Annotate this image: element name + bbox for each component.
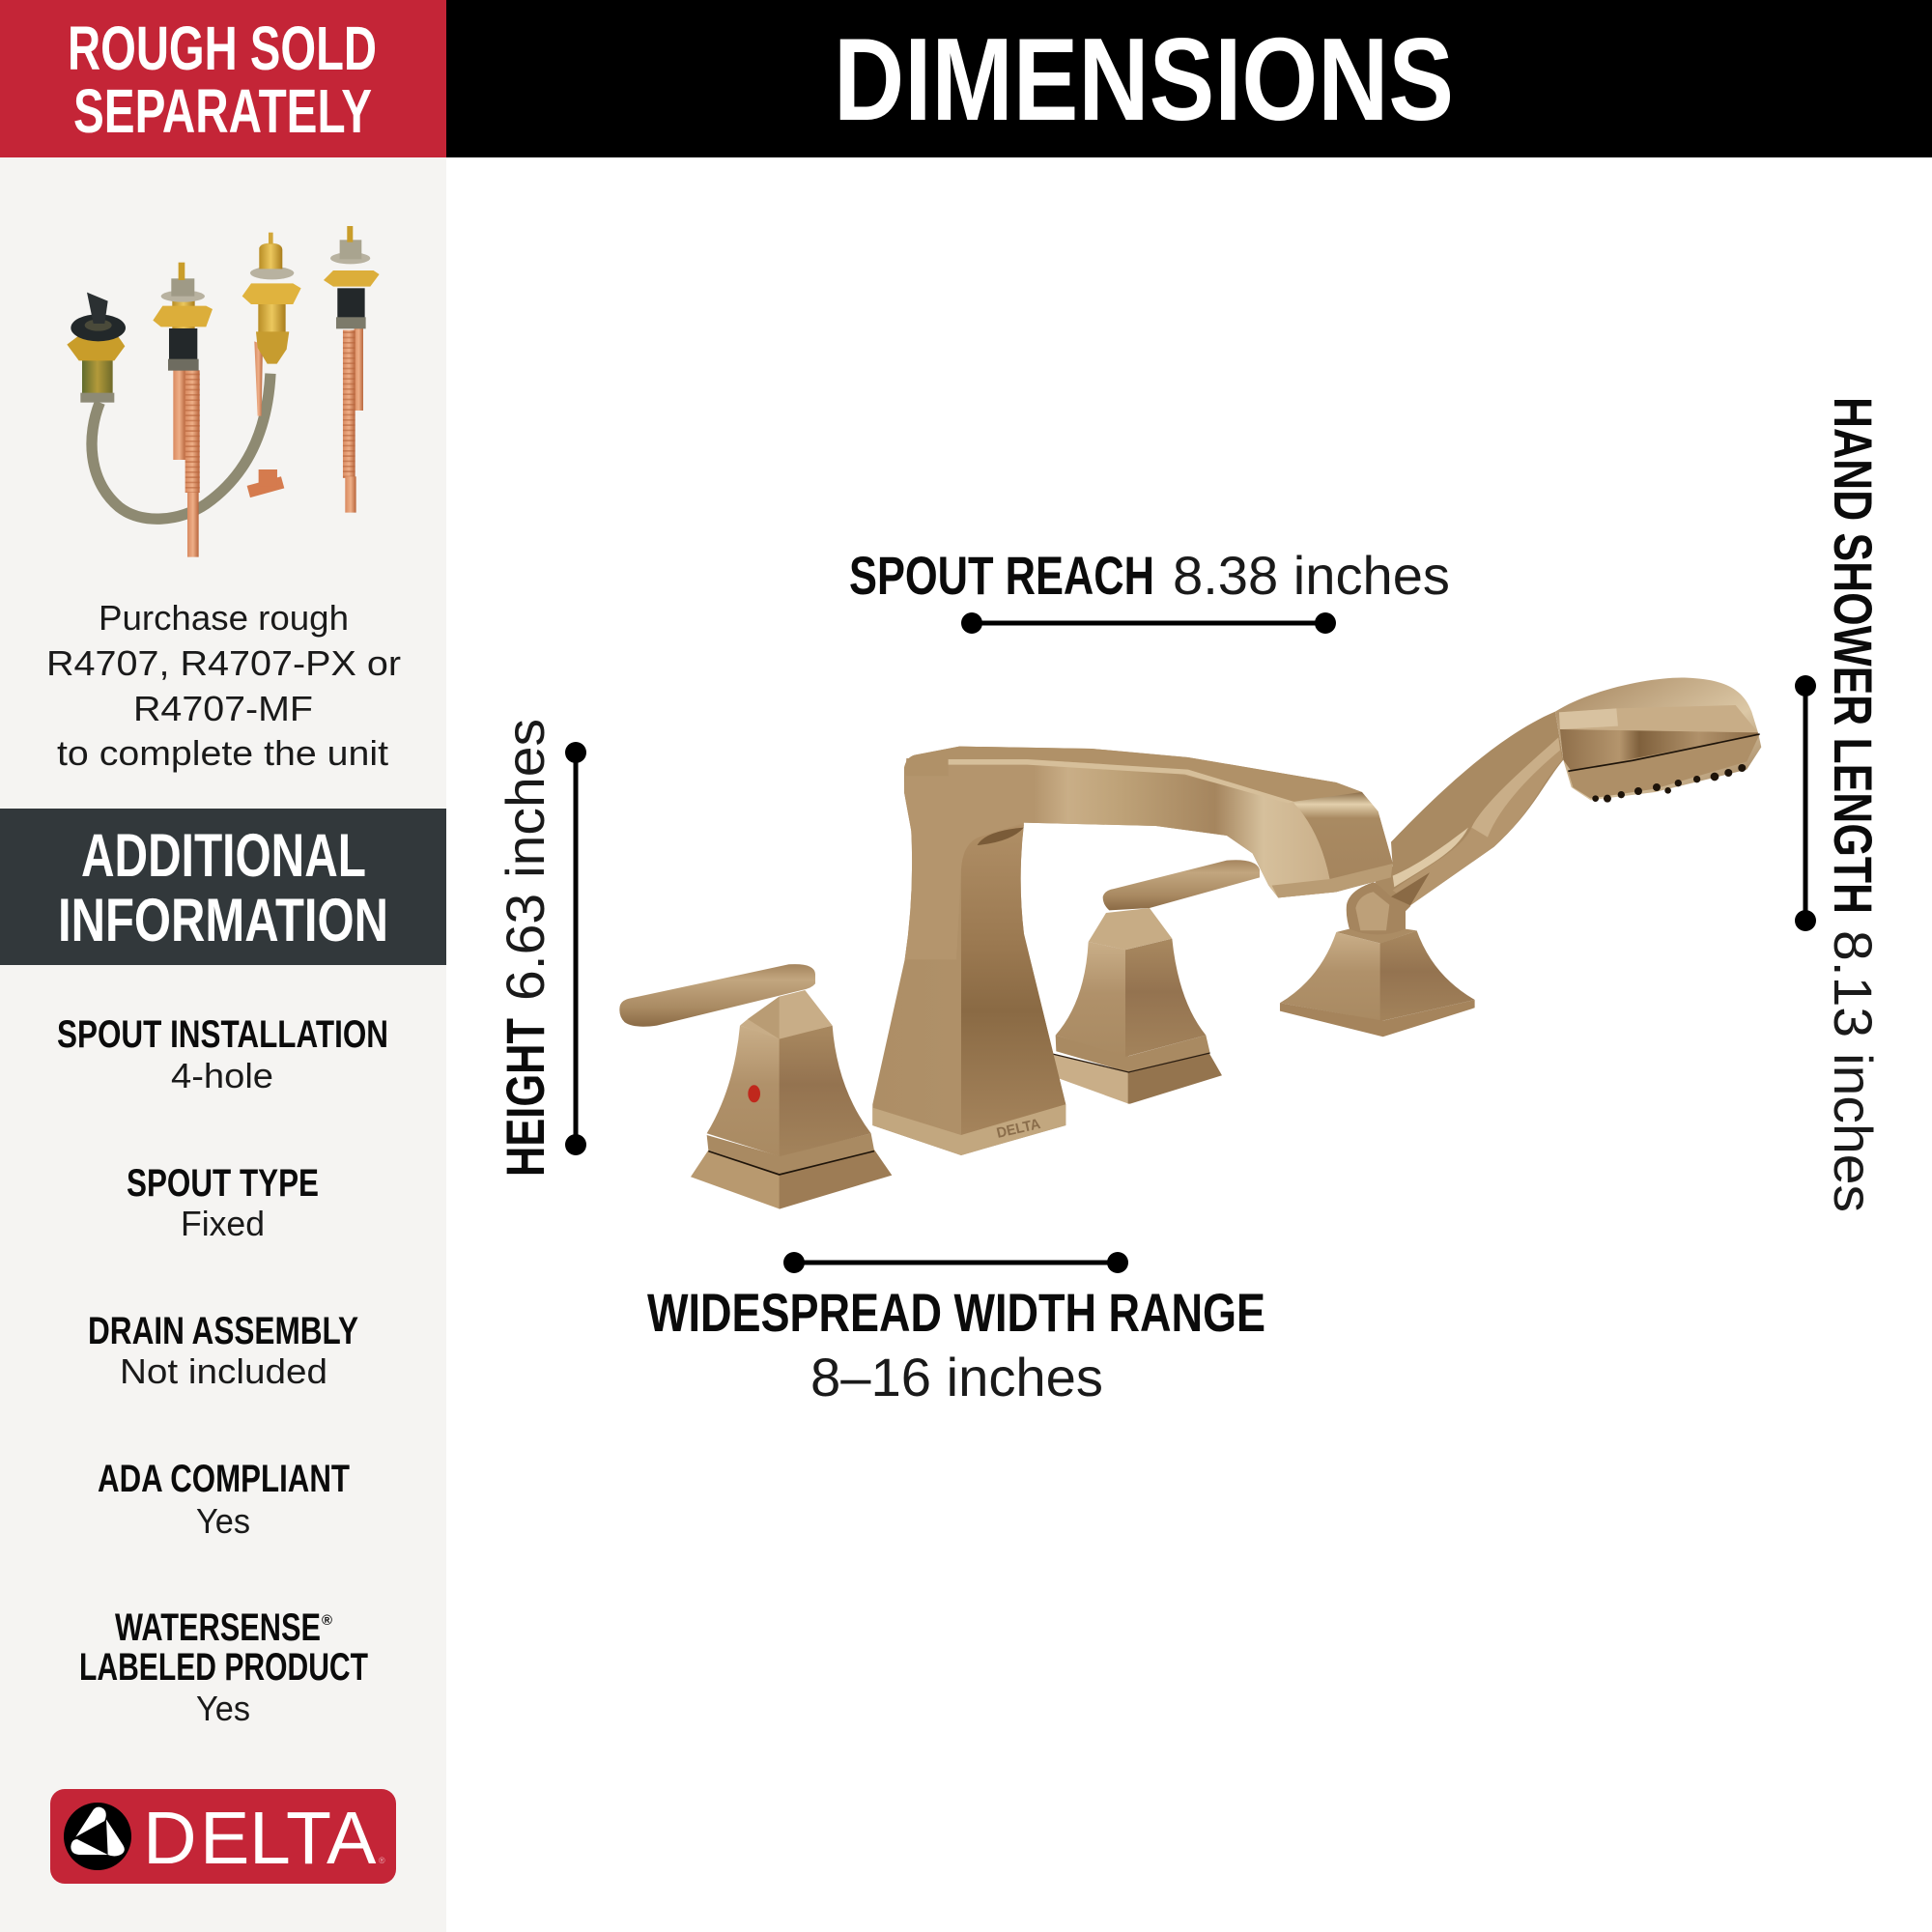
spout and left handle: [619, 747, 1393, 1209]
spec: spout type: Fixed: [181, 1204, 265, 1243]
spec: spout installation: SPOUT INSTALLATION: [57, 1013, 388, 1056]
riser: [1347, 882, 1413, 937]
text: purchase rough note: R4707-MF: [133, 689, 313, 728]
title banner: dimensions: [446, 0, 1932, 157]
third valve: [242, 233, 301, 416]
hand shower base: [1280, 929, 1475, 1037]
left handle body: [707, 1026, 780, 1156]
label: widespread width range: [647, 1282, 1265, 1407]
head band: [1559, 705, 1758, 732]
left handle base: [691, 1151, 780, 1209]
label: spout reach: SPOUT REACH: [849, 545, 1154, 606]
label: widespread width range: 8–16 inches: [810, 1347, 1103, 1407]
spec: watersense labeled product: LABELED PRODUCT: [79, 1646, 368, 1689]
head middle: [1560, 729, 1758, 771]
label: hand shower length: HAND SHOWER LENGTH: [1823, 397, 1884, 914]
spec: drain assembly: Not included: [120, 1351, 327, 1391]
spout base band: [872, 1104, 1065, 1155]
spout tip: [1293, 792, 1393, 879]
label: height: 6.63 inches: [495, 719, 555, 1001]
label: widespread width range: WIDESPREAD WIDTH RANGE: [647, 1282, 1265, 1343]
arch highlight: [978, 828, 1024, 845]
head dome: [1555, 678, 1761, 800]
dimension line: hand shower length: [1795, 675, 1816, 931]
spec: spout type: SPOUT TYPE: [127, 1162, 319, 1205]
spout arm: [904, 753, 1336, 897]
text: purchase rough note: to complete the unit: [57, 733, 388, 773]
spout column right face: [961, 824, 1065, 1135]
panel: left sidebar: [0, 157, 446, 1932]
spec: spout installation: 4-hole: [171, 1056, 273, 1095]
title banner: dimensions: DIMENSIONS: [834, 14, 1454, 145]
banner: rough sold separately: [0, 0, 446, 157]
text: purchase rough note: [46, 598, 401, 773]
spec: drain assembly: [88, 1310, 358, 1391]
spec: ada compliant: ADA COMPLIANT: [98, 1458, 350, 1500]
hot indicator: [748, 1085, 760, 1102]
banner: rough sold separately: SEPARATELY: [73, 76, 372, 146]
logo: delta: ®: [379, 1856, 385, 1865]
spec: watersense labeled product: [79, 1606, 368, 1728]
label: height: [495, 719, 555, 1177]
spec: spout type: [127, 1162, 319, 1243]
dimension line: spout reach: [961, 612, 1336, 634]
image: bronze faucet set: [619, 678, 1761, 1209]
label: spout reach: 8.38 inches: [1173, 545, 1450, 606]
text: purchase rough note: R4707, R4707-PX or: [46, 643, 401, 683]
spec: watersense labeled product: Yes: [196, 1689, 250, 1728]
label: spout reach: [849, 545, 1450, 606]
heading: additional information: ADDITIONAL: [81, 822, 366, 890]
dimension line: height: [565, 742, 586, 1155]
spec: ada compliant: Yes: [196, 1501, 250, 1541]
heading: additional information: [0, 809, 446, 965]
spout top surface: [904, 747, 1362, 802]
image: rough valve kit: [67, 226, 380, 557]
hose: [92, 374, 270, 519]
fourth valve: [324, 226, 380, 513]
spout logo text: DELTA: [995, 1116, 1042, 1142]
spec: drain assembly: DRAIN ASSEMBLY: [88, 1310, 358, 1352]
label: height: HEIGHT: [495, 1018, 555, 1177]
heading: additional information: INFORMATION: [58, 887, 388, 954]
spec: spout installation: [57, 1013, 388, 1095]
logo: delta: DELTA: [143, 1797, 377, 1880]
shower nozzles: [1592, 764, 1746, 803]
left handle lever: [619, 964, 815, 1027]
hand shower: [1347, 678, 1761, 937]
label: hand shower length: 8.13 inches: [1823, 930, 1884, 1212]
head lower: [1568, 734, 1760, 799]
logo: delta: [50, 1789, 396, 1884]
second valve: [153, 263, 213, 557]
right handle: [1052, 860, 1260, 1104]
spec: watersense labeled product: WATERSENSE: [115, 1606, 321, 1649]
dimension line: widespread width: [783, 1252, 1128, 1273]
text: purchase rough note: Purchase rough: [99, 598, 349, 638]
spec: watersense labeled product: ®: [322, 1612, 332, 1629]
spec: ada compliant: [98, 1458, 350, 1541]
spout silhouette: [872, 747, 1393, 1155]
wand: [1375, 712, 1563, 905]
copper tee: [248, 469, 283, 492]
left diverter: [67, 293, 126, 403]
banner: rough sold separately: ROUGH SOLD: [68, 14, 377, 83]
